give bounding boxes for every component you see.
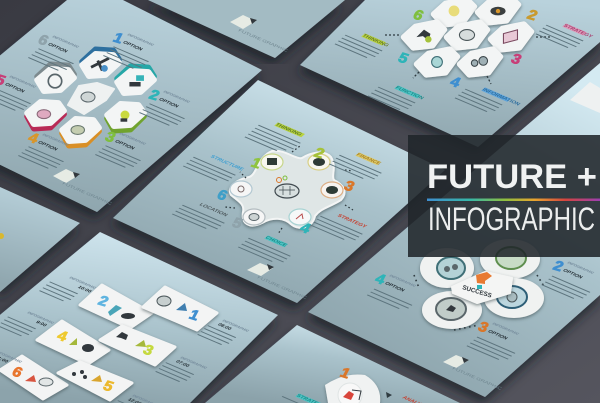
text block C: 9:00 bbox=[34, 320, 48, 328]
hex bottom right bbox=[459, 49, 501, 75]
panel: hexagon sheet bbox=[0, 0, 262, 212]
hex right bbox=[490, 24, 532, 50]
label left: THINKING bbox=[361, 34, 390, 48]
card pair 2: 1 bbox=[186, 307, 202, 324]
connector dots bbox=[385, 35, 550, 84]
number 6: 6 bbox=[214, 187, 230, 204]
panel: star sheet bbox=[113, 80, 445, 303]
hexagon option 2 bbox=[117, 66, 154, 93]
text block 6: OPTION bbox=[46, 42, 69, 54]
label finance bbox=[329, 148, 390, 182]
text block 3: INFOGRAPHIC bbox=[118, 132, 147, 146]
text block A bbox=[40, 272, 97, 306]
logo bbox=[53, 169, 113, 206]
number 1: 1 bbox=[337, 365, 353, 382]
text block 2: INFOGRAPHIC bbox=[162, 90, 191, 104]
banner bbox=[408, 135, 600, 257]
label structure bbox=[183, 150, 245, 185]
central brain icon bbox=[275, 176, 299, 198]
white card top right bbox=[570, 82, 600, 113]
circle top left bbox=[420, 248, 474, 288]
logo bbox=[443, 355, 503, 391]
hexagon option 5 bbox=[27, 102, 64, 129]
card pair 4: 3 bbox=[140, 342, 156, 359]
card pair 4 bbox=[100, 326, 175, 365]
text block 4: OPTION bbox=[36, 140, 59, 152]
label thinking bbox=[245, 118, 309, 155]
text block 6 bbox=[28, 35, 89, 73]
text block 5: INFOGRAPHIC bbox=[8, 75, 37, 89]
text block bottom: INFOGRAPHIC bbox=[491, 322, 520, 336]
number 4: 4 bbox=[25, 130, 42, 147]
number 1: 1 bbox=[110, 30, 126, 47]
text block 6: INFOGRAPHIC bbox=[51, 35, 80, 49]
text block 4: INFOGRAPHIC bbox=[41, 133, 70, 147]
icon node 5 bbox=[243, 209, 265, 225]
text block right: INFOGRAPHIC bbox=[566, 261, 595, 275]
label strategy bbox=[282, 390, 327, 403]
label right bbox=[536, 18, 594, 51]
text block C: INFOGRAPHIC bbox=[26, 311, 55, 325]
connector dots bbox=[225, 146, 353, 234]
text block B: 08:00 bbox=[216, 322, 233, 332]
card pair 2 bbox=[143, 287, 217, 330]
icon node 6 bbox=[230, 181, 252, 197]
text block D: 07:00 bbox=[174, 359, 191, 369]
card pair 3: 4 bbox=[54, 328, 71, 345]
number 3: 3 bbox=[102, 129, 118, 146]
card pair 6: 5 bbox=[100, 378, 116, 395]
text block 3: OPTION bbox=[113, 139, 136, 151]
card pair 3 bbox=[37, 321, 109, 364]
text block 2: OPTION bbox=[157, 97, 180, 109]
number 5: 5 bbox=[229, 215, 245, 232]
hex left bbox=[403, 22, 445, 48]
number 3: 3 bbox=[475, 319, 491, 336]
text block 3 bbox=[95, 132, 156, 170]
label thinking: THINKING bbox=[274, 123, 303, 137]
text block bottom: OPTION bbox=[486, 329, 509, 341]
hex bottom left bbox=[416, 49, 458, 75]
text block 1: INFOGRAPHIC bbox=[126, 33, 155, 47]
text block 5: OPTION bbox=[3, 82, 26, 94]
central hexagon bbox=[68, 83, 114, 114]
label bottom left bbox=[368, 80, 425, 113]
icon node 2 bbox=[308, 154, 330, 170]
icon node 1 bbox=[261, 154, 283, 170]
card pair 1: 2 bbox=[95, 293, 111, 310]
label location bbox=[172, 198, 233, 232]
text block left bbox=[367, 274, 429, 311]
text block C bbox=[0, 307, 55, 341]
icon: far left number bbox=[0, 233, 4, 239]
hexagon grid bbox=[403, 0, 532, 75]
card pair 6 bbox=[58, 362, 132, 400]
text block right: OPTION bbox=[561, 268, 584, 280]
panel: bottom center sheet bbox=[205, 325, 460, 403]
logo bbox=[247, 263, 308, 300]
number 1: 1 bbox=[248, 155, 264, 172]
label right: STRATEGY bbox=[562, 24, 594, 39]
card pair 1 bbox=[80, 285, 152, 328]
number 6: 6 bbox=[410, 7, 426, 24]
label location: LOCATION bbox=[198, 203, 229, 218]
number 2: 2 bbox=[311, 145, 327, 162]
logo: top middle sheet: FUTURE GRAPHIC bbox=[237, 28, 289, 53]
number 5: 5 bbox=[395, 50, 411, 67]
logo: FUTURE GRAPHIC bbox=[451, 366, 503, 391]
number 4: 4 bbox=[372, 271, 389, 288]
number 4: 4 bbox=[297, 220, 314, 237]
hex center bbox=[446, 22, 488, 48]
text block B bbox=[198, 317, 250, 348]
label finance: FINANCE bbox=[355, 153, 382, 166]
logo: FUTURE GRAPHIC bbox=[256, 275, 308, 300]
number 2: 2 bbox=[146, 87, 162, 104]
text block right bbox=[542, 261, 600, 301]
panel: circles sheet bbox=[308, 63, 600, 397]
circle top right bbox=[480, 239, 540, 279]
text block A: INFOGRAPHIC bbox=[68, 276, 97, 290]
text block E bbox=[118, 392, 160, 403]
label bottom right bbox=[455, 82, 521, 119]
hexagon option 4 bbox=[62, 119, 99, 146]
text block 2 bbox=[139, 90, 200, 128]
panel: honeycomb sheet bbox=[300, 0, 600, 147]
label strategy bbox=[310, 209, 371, 243]
rainbow divider bbox=[427, 198, 600, 201]
hex top right bbox=[477, 0, 519, 23]
hexagon option 6 bbox=[37, 64, 74, 91]
number 6: 6 bbox=[35, 32, 51, 49]
panel: far left sheet bbox=[0, 187, 80, 292]
hexagon option 3 bbox=[107, 104, 144, 131]
label bottom right: INFORMATION bbox=[481, 88, 521, 107]
star diagram bbox=[230, 151, 345, 228]
text block D bbox=[156, 354, 208, 385]
white badge bbox=[325, 374, 380, 403]
icon node 3 bbox=[321, 182, 343, 198]
label structure: STRUCTURE bbox=[209, 155, 245, 172]
circle bottom left bbox=[422, 291, 482, 329]
icon node 4 bbox=[289, 209, 311, 225]
number 2: 2 bbox=[550, 258, 566, 275]
text block 1: OPTION bbox=[121, 40, 144, 52]
success card bbox=[452, 272, 512, 303]
number 4: 4 bbox=[447, 74, 464, 91]
hexagon option 1 bbox=[82, 49, 119, 76]
label strategy: STRATEGY bbox=[336, 214, 368, 229]
text block 4 bbox=[18, 133, 79, 171]
card pair 5: 6 bbox=[9, 364, 25, 381]
text block left: INFOGRAPHIC bbox=[388, 274, 417, 288]
success card: SUCCESS bbox=[461, 284, 492, 300]
text block A: 10:00 bbox=[76, 285, 93, 294]
label choice: CHOICE bbox=[264, 236, 288, 248]
number 3: 3 bbox=[508, 51, 524, 68]
label left bbox=[335, 28, 390, 60]
number 2: 2 bbox=[524, 7, 540, 24]
logo: FUTURE GRAPHIC bbox=[61, 181, 113, 206]
text block 5 bbox=[0, 75, 46, 113]
text block 1 bbox=[103, 33, 164, 71]
number 3: 3 bbox=[341, 178, 357, 195]
text block B: INFOGRAPHIC bbox=[221, 319, 250, 333]
text block left: OPTION bbox=[383, 281, 406, 293]
card pair 5 bbox=[0, 356, 67, 399]
text block bottom bbox=[467, 322, 532, 362]
panel: top middle sheet bbox=[148, 0, 345, 58]
circle bottom right bbox=[484, 278, 544, 318]
label choice bbox=[238, 231, 299, 265]
logo: top middle sheet bbox=[230, 15, 289, 53]
hex top left bbox=[433, 0, 475, 25]
label bottom left: FUNCTION bbox=[394, 86, 425, 101]
banner title: FUTURE + bbox=[427, 158, 597, 196]
panel: cards sheet bbox=[0, 232, 278, 403]
connector dots bbox=[414, 275, 545, 330]
pointer arrow bbox=[386, 392, 392, 398]
text block D: INFOGRAPHIC bbox=[179, 356, 208, 370]
